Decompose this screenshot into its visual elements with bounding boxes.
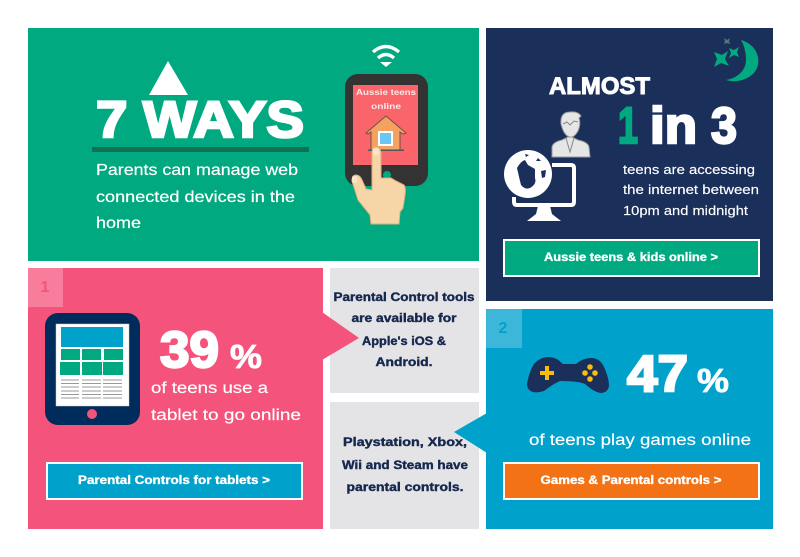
panel: 7 ways header: [28, 28, 479, 261]
panel: consoles callout: parental controls.: [346, 482, 464, 494]
icon: game controller: [527, 357, 609, 393]
button: Games and Parental controls: [504, 463, 759, 499]
panel: parental control tools callout: Parental Control tools: [334, 292, 474, 304]
panel: consoles callout: [330, 402, 479, 529]
panel: parental control tools callout: [330, 268, 479, 393]
button: Games and Parental controls: Games & Parental controls >: [540, 475, 722, 487]
stat: 47%: [627, 345, 729, 402]
panel: tablets: [28, 268, 359, 529]
intro text: Parents can manage web: [96, 162, 298, 179]
stat description: teens are accessing: [623, 162, 755, 177]
button: Parental Controls for tablets: Parental Controls for tablets >: [78, 475, 270, 487]
stat description: 10pm and midnight: [623, 203, 748, 218]
title underline: [92, 147, 309, 152]
badge: 2: 2: [499, 320, 508, 337]
panel: consoles callout: Playstation, Xbox,: [343, 437, 467, 449]
icon: computer with globe: [504, 150, 574, 221]
title: 7 WAYS: 7 WAYS: [96, 91, 304, 148]
stat: 47%: %: [697, 362, 729, 399]
stat description: of teens play games online: [529, 432, 751, 449]
button: Parental Controls for tablets: [47, 463, 302, 499]
badge: 2: [486, 309, 522, 348]
stat description: [151, 380, 301, 424]
stat description: the internet between: [623, 182, 759, 197]
icon: wifi: [373, 46, 399, 67]
stat description: tablet to go online: [151, 407, 301, 424]
panel: consoles callout: Wii and Steam have: [342, 460, 468, 472]
panel: parental control tools callout: Android.: [376, 357, 432, 369]
badge: 1: 1: [41, 279, 50, 296]
stat: 1 in 3: in: [650, 97, 697, 154]
stat: 1 in 3: 3: [711, 97, 737, 154]
stat: 1 in 3: [618, 97, 737, 154]
icon: tablet: [45, 313, 140, 425]
intro text: home: [96, 215, 141, 232]
badge: 1: [28, 268, 63, 307]
icon: up triangle: [149, 61, 188, 95]
button: Aussie teens and kids online: Aussie teens & kids online >: [544, 252, 718, 264]
icon: phone with house and hand: Aussie teens: [356, 87, 416, 97]
icon: teen avatar: [552, 112, 590, 157]
panel: parental control tools callout: Apple's iOS &: [362, 336, 446, 348]
stat description: of teens use a: [151, 380, 268, 397]
icon: moon and stars: [714, 38, 758, 81]
heading: ALMOST: ALMOST: [549, 73, 650, 100]
icon: phone with house and hand: [345, 74, 428, 224]
stat: 39%: [160, 321, 262, 378]
stat: 1 in 3: 1: [618, 97, 638, 154]
stat description: [623, 162, 759, 218]
icon: phone with house and hand: online: [371, 101, 401, 111]
panel: almost 1 in 3: [486, 28, 773, 301]
stat: 39%: %: [230, 338, 262, 375]
stat: 47%: 47: [627, 345, 688, 402]
button: Aussie teens and kids online: [504, 240, 759, 276]
intro text: [96, 162, 298, 232]
panel: parental control tools callout: are available for: [352, 313, 457, 325]
arrow to gray callout: [454, 413, 487, 453]
stat: 39%: 39: [160, 321, 219, 378]
intro text: connected devices in the: [96, 189, 295, 206]
arrow to gray callout: [322, 312, 359, 360]
panel: games: [454, 309, 773, 529]
